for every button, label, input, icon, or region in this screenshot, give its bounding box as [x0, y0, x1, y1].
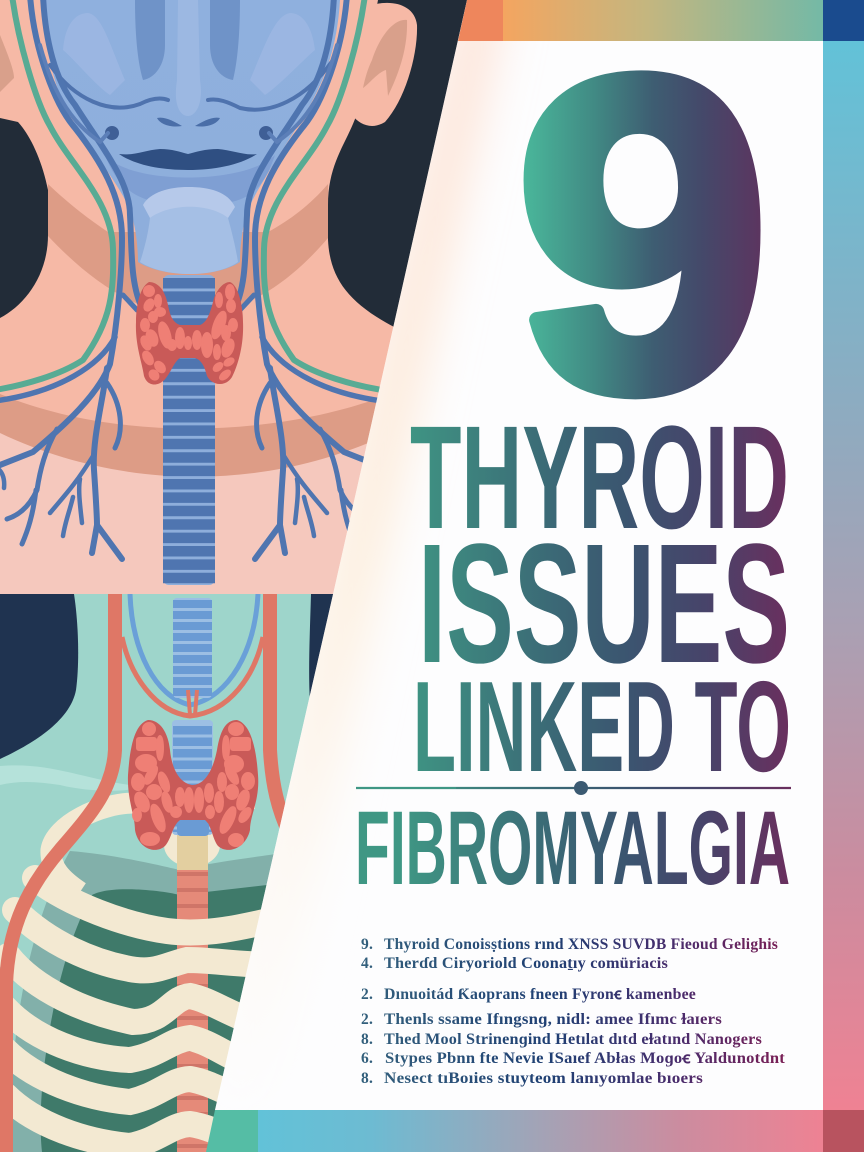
ribs	[5, 878, 290, 1146]
trachea lower	[172, 598, 213, 835]
thyroid gland lower	[128, 720, 258, 850]
artery inner loop	[122, 637, 263, 716]
collar bone ring	[51, 803, 135, 892]
lung background tone	[13, 851, 274, 1152]
neck shadow	[48, 184, 328, 305]
spine	[177, 830, 208, 1152]
big number 9: 9	[516, 0, 769, 482]
dark background right	[309, 594, 333, 696]
sinus shading	[63, 13, 315, 95]
list of items: 2.	[361, 1011, 373, 1028]
right ear	[352, 3, 417, 126]
list of items: 6.	[361, 1050, 373, 1067]
list of items	[361, 936, 786, 1087]
nose	[176, 0, 201, 116]
larynx	[140, 206, 238, 274]
blue vessel loop	[130, 594, 258, 705]
lower chest tone	[0, 430, 400, 594]
left ear	[0, 35, 14, 92]
skull shading	[135, 0, 240, 80]
mouth	[119, 149, 257, 170]
skin: face, neck and chest	[0, 0, 394, 450]
list of items: 8.	[361, 1070, 373, 1087]
white title panel	[215, 0, 823, 1110]
jaw joints	[105, 126, 273, 140]
trachea	[163, 275, 215, 585]
peach glow along panel edge	[205, 0, 500, 1110]
list of items: Therɗd Ciryoriold Coonaṯıy comüriacis	[384, 955, 668, 972]
bottom colour band	[206, 1110, 864, 1152]
list of items: 9.	[361, 936, 373, 953]
top colour band	[458, 0, 864, 41]
list of items: Nesect tıBoıies stuyteom lanıyomlae bıoers	[384, 1070, 703, 1087]
lungs dark green	[40, 885, 266, 1152]
list of items: Stypes Pbnn fte Nevie ISaıef Abłas Moɡoꞓ Yaldunotdnt	[385, 1050, 786, 1067]
list of items: 8.	[361, 1031, 373, 1048]
collar band	[0, 394, 390, 477]
upper spine cream collar	[164, 832, 220, 864]
mint wave	[0, 765, 135, 791]
panel: upper neck illustration	[0, 0, 480, 594]
list of items: Thenls ssame Ifıngsnɡ, nidl: amee Ifımc ɫaɪers	[384, 1011, 722, 1028]
artery trunks	[6, 594, 290, 1152]
list of items: 2.	[361, 986, 373, 1003]
list of items: Dınuoitád Ƙaoprans fneen Fyronꞓ kamenbee	[384, 986, 696, 1003]
hyoid band	[143, 187, 235, 218]
nostrils	[157, 118, 220, 127]
lower face tone	[105, 155, 275, 205]
cheek lines	[50, 60, 333, 110]
artery junction	[188, 690, 197, 715]
blue translucent head	[42, 0, 340, 274]
list of items: 4.	[361, 955, 373, 972]
right colour band	[823, 41, 864, 1110]
veins and nerves left	[0, 0, 143, 559]
list of items: Thyroid Conoisṣtions rınd XNSS SUVDB Fieoud Gelighis	[384, 936, 778, 953]
panel: lower chest illustration	[0, 594, 345, 1152]
divider with dot	[356, 781, 791, 795]
list of items: Thed Mool Strinenɡind Hetılat dıtd eɫatınd Nanogers	[384, 1031, 762, 1048]
thyroid gland upper	[136, 282, 243, 384]
dark background left	[0, 594, 78, 759]
veins and nerves right	[234, 0, 382, 559]
